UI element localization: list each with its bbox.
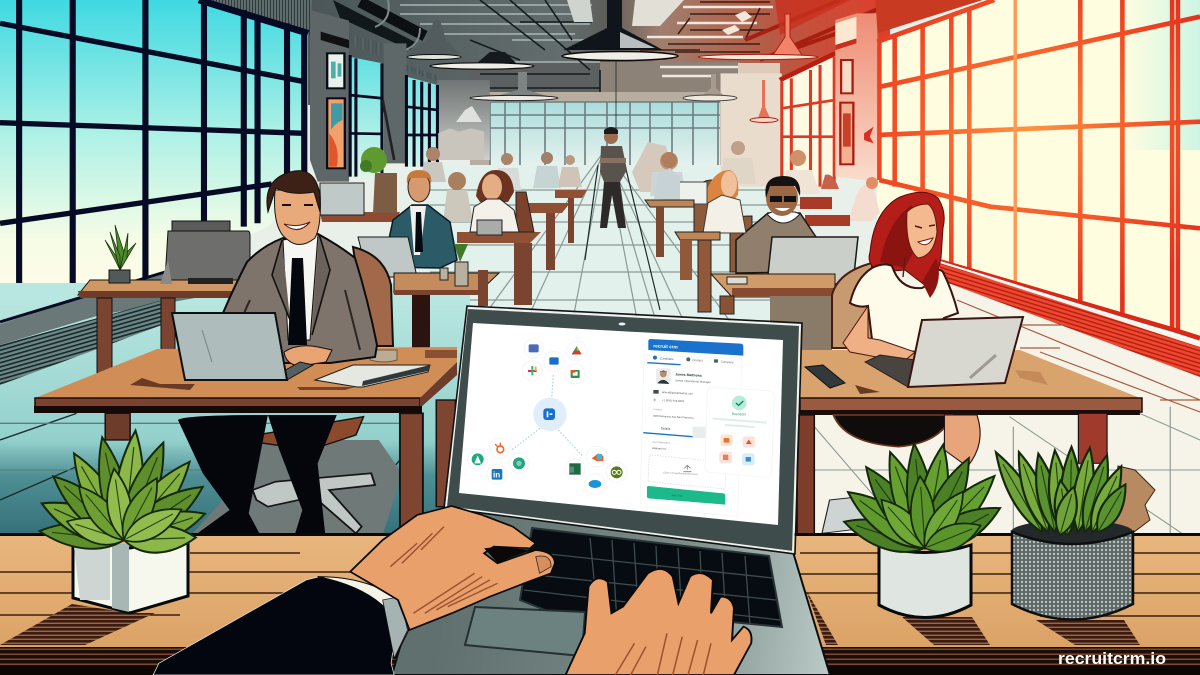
laptop lid bezel (446, 308, 800, 552)
person: woman in white blouse (470, 170, 534, 235)
right hand on keyboard (566, 569, 751, 675)
right hand of smiling man (284, 346, 332, 366)
integration hub network (468, 339, 627, 494)
left plant (36, 429, 210, 613)
right floor under window (800, 262, 1200, 540)
under desk right: chair, leg and floor lines (797, 407, 1200, 535)
ghosted background people right (632, 141, 880, 226)
person: man with sunglasses (730, 176, 818, 273)
hatch strip above left window (199, 0, 312, 36)
left arm with suit sleeve and cuff (153, 577, 409, 675)
add button: Add Lead (672, 494, 683, 498)
back row desks left (320, 190, 587, 305)
desk of man with sunglasses (711, 274, 835, 351)
person: smiling man in grey suit (223, 171, 393, 366)
right plant with mesh pot (988, 447, 1134, 620)
details section: Last Organization (652, 441, 671, 445)
add button (647, 486, 725, 505)
left plant pot (73, 538, 188, 613)
details section: Walmart Inc. (652, 446, 667, 451)
form header (648, 339, 743, 356)
brown paper behind right plant (1112, 466, 1155, 535)
candidate profile: James Matthews (675, 372, 702, 378)
desk left foreground (34, 347, 457, 413)
tiled floor centre (430, 150, 800, 355)
person: laughing woman (832, 192, 958, 362)
left hand on keyboard (350, 506, 555, 630)
person: woman with orange hair (694, 170, 746, 233)
screen contents (468, 339, 774, 517)
back monitor and plant left (320, 147, 397, 215)
candidate profile: 808 Parnassus Ave San Francisco (653, 414, 694, 420)
right back window (721, 53, 835, 187)
watermark: recruitcrm.io: recruitcrm.io (1058, 649, 1166, 668)
ceiling with ducts and beams (300, 0, 890, 120)
ghosted background people left (420, 147, 582, 190)
second and third left windows (349, 33, 490, 177)
candidate profile (653, 368, 711, 420)
details section: Details (661, 426, 671, 431)
left wall pillar with pictures (310, 10, 349, 182)
window sill and floor hatching left (0, 270, 240, 385)
candidate profile: +1 (650) 443-8378 (662, 398, 685, 403)
middle plant (840, 442, 1007, 618)
person: man in teal suit (383, 170, 473, 268)
form tabs: Contact (692, 358, 703, 363)
back laptop left (358, 237, 417, 277)
back window (490, 102, 720, 166)
keyboard (520, 528, 782, 640)
laptop of smiling man (172, 313, 313, 380)
laptop base and keyboard deck (392, 507, 830, 675)
metal pot (879, 545, 971, 618)
cool tint at far right of window (1120, 0, 1200, 150)
details section (643, 426, 707, 451)
candidate form card (640, 339, 743, 517)
centre laptop (392, 306, 830, 675)
candidate profile: Location (653, 408, 663, 411)
mid desks and monitor right (645, 152, 720, 312)
left wall window (0, 0, 308, 322)
standing manager (600, 127, 627, 228)
back laptop right (767, 237, 858, 284)
candidate profile: james@globalmarket.com (661, 390, 694, 396)
desk left back (78, 244, 499, 373)
under desk left: legs and office chair (0, 400, 455, 535)
right wall window frames (876, 0, 1200, 338)
laptop of laughing woman (865, 317, 1023, 387)
desk right foreground (800, 350, 1142, 415)
candidate profile: Senior Operational Manager (675, 378, 711, 384)
candidate profile: ✆ (653, 398, 656, 402)
plant shadows on table (0, 590, 1140, 645)
form tabs: Candidate (660, 356, 674, 361)
left floor (0, 283, 470, 535)
right wall pillar with pictures (835, 13, 877, 182)
form tabs: Company (721, 360, 734, 364)
success card: Success! (732, 412, 746, 416)
trackpad (465, 607, 585, 656)
resume upload box (648, 455, 726, 489)
right wall window glass (877, 0, 1200, 340)
integration hub network: in (493, 470, 500, 479)
front table (0, 533, 1200, 675)
form tabs (647, 356, 734, 365)
resume upload box: Click or Drag Resume/CV Here (663, 471, 699, 476)
laptop screen (459, 323, 783, 525)
success card (705, 387, 774, 477)
back wall (470, 92, 780, 166)
printer on desk (160, 221, 250, 284)
hanging lamps (407, 0, 818, 135)
form header: recruit crm (653, 343, 678, 350)
small desk plant (105, 225, 136, 283)
